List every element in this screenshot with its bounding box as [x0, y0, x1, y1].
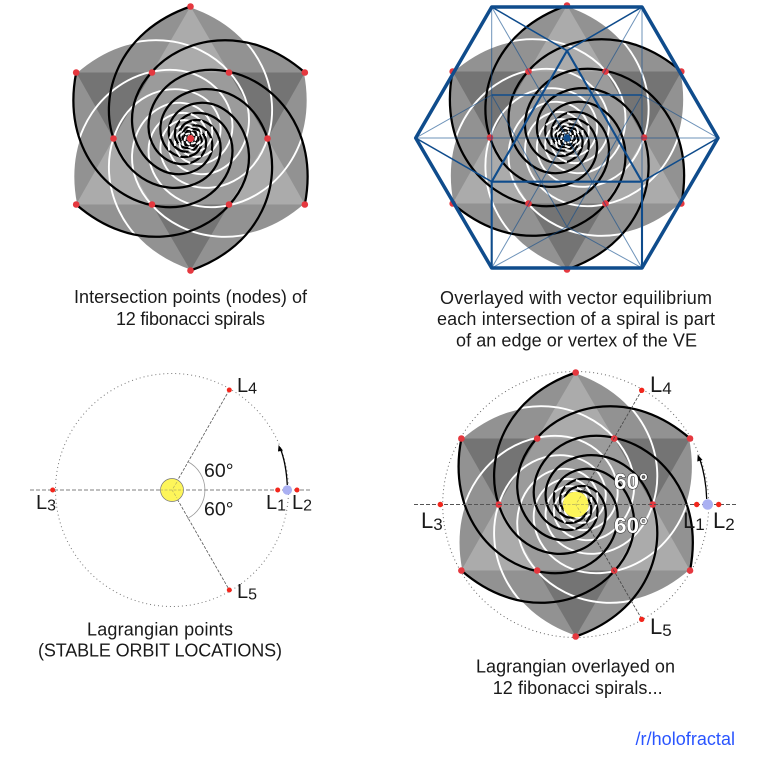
point labels L1 to L5: L — [266, 492, 277, 514]
caption: overlay: 12 fibonacci spirals... — [493, 678, 663, 698]
horizontal axis — [30, 489, 312, 491]
Lagrange point dots — [438, 388, 721, 622]
angle labels — [204, 460, 234, 520]
Lagrange point dots — [50, 388, 300, 592]
panel: intersection points of 12 spirals — [35, 0, 346, 329]
point labels L1 to L5: 4 — [662, 379, 672, 398]
planet — [702, 499, 713, 510]
point labels L1 to L5: L — [421, 508, 433, 533]
sun — [563, 492, 589, 517]
caption: VE overlay: Overlayed with vector equilibrium — [440, 288, 712, 308]
planet — [283, 485, 292, 495]
angle labels: 60° — [204, 498, 234, 520]
spiral flower under VE — [412, 0, 722, 278]
caption: Lagrangian points: Lagrangian points — [87, 620, 233, 640]
point labels L1 to L5 — [421, 372, 735, 640]
angle labels with white halo: 60° — [614, 513, 648, 538]
caption: Lagrangian points: (STABLE ORBIT LOCATIONS) — [38, 640, 282, 660]
sun — [160, 478, 184, 502]
caption: nodes: Intersection points (nodes) of — [74, 287, 308, 307]
radial lines to L4 and L5 — [576, 390, 642, 619]
horizontal axis — [414, 504, 737, 506]
spiral flower — [421, 364, 731, 644]
point labels L1 to L5: L — [36, 492, 47, 514]
point labels L1 to L5: 5 — [662, 621, 672, 640]
point labels L1 to L5: 2 — [303, 498, 312, 514]
angle labels with white halo — [614, 469, 648, 538]
caption: VE overlay: of an edge or vertex of the VE — [456, 330, 697, 350]
credit link text: /r/holofractal — [636, 729, 735, 749]
orbit dotted circle — [443, 372, 709, 638]
point labels L1 to L5: 1 — [695, 515, 705, 534]
point labels L1 to L5: 3 — [433, 515, 443, 534]
point labels L1 to L5: L — [650, 614, 662, 639]
angle labels: 60° — [204, 460, 234, 482]
60 degree arc — [188, 462, 205, 518]
vector equilibrium line drawing — [416, 7, 718, 268]
point labels L1 to L5: 1 — [277, 498, 286, 514]
orbit direction arrow — [278, 445, 287, 485]
point labels L1 to L5: 2 — [725, 515, 735, 534]
point labels L1 to L5: 5 — [248, 586, 257, 604]
point labels L1 to L5 — [36, 375, 312, 604]
orbit direction arrow — [697, 454, 707, 499]
caption: overlay: Lagrangian overlayed on — [476, 656, 675, 676]
point labels L1 to L5: L — [237, 375, 248, 397]
point labels L1 to L5: L — [292, 492, 303, 514]
orbit dotted circle — [56, 374, 288, 606]
point labels L1 to L5: L — [683, 508, 695, 533]
panel: overlay with vector equilibrium — [412, 0, 722, 350]
point labels L1 to L5: L — [713, 508, 725, 533]
panel: Lagrangian points diagram — [30, 374, 312, 660]
point labels L1 to L5: L — [237, 581, 248, 603]
caption: nodes: 12 fibonacci spirals — [116, 309, 265, 329]
caption: VE overlay: each intersection of a spiral is part — [437, 309, 715, 329]
angle labels with white halo: 60° — [614, 469, 648, 494]
point labels L1 to L5: 4 — [248, 380, 257, 398]
panel: Lagrangian overlay on spirals — [414, 364, 737, 698]
point labels L1 to L5: L — [650, 372, 662, 397]
spiral flower diagram — [35, 0, 346, 278]
radial lines to L4 and L5 — [172, 390, 229, 590]
point labels L1 to L5: 3 — [47, 498, 56, 514]
